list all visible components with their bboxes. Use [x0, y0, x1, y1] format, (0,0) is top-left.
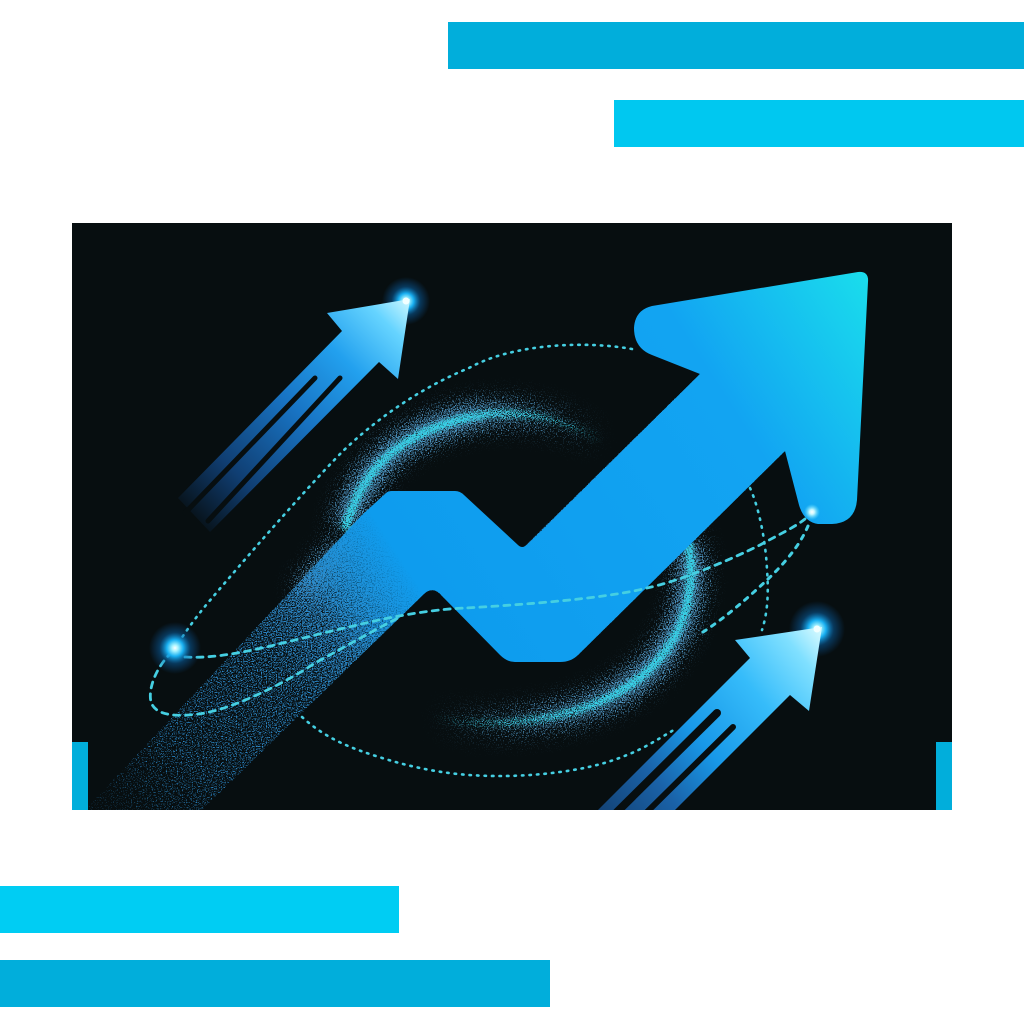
- glow behind bottom-right arrow tip: [790, 602, 844, 656]
- arrow body and head: [306, 272, 868, 662]
- top bar 2: [614, 100, 1024, 147]
- bottom bar 2: [0, 960, 550, 1007]
- top bar 1: [448, 22, 1024, 69]
- arrow tail stipple: [85, 374, 785, 810]
- glow points: [149, 298, 820, 674]
- small arrow bottom right: [598, 627, 822, 812]
- glow behind top-left arrow tip: [382, 277, 430, 325]
- particle ring: [300, 414, 691, 723]
- dotted trajectory lines: [150, 345, 808, 776]
- right corner tab: [936, 742, 952, 810]
- panel: dark chart background: [72, 223, 952, 812]
- bottom bar 1: [0, 886, 399, 933]
- large upward arrow: [85, 272, 868, 810]
- left corner tab: [72, 742, 88, 810]
- small arrow top left: [178, 299, 410, 532]
